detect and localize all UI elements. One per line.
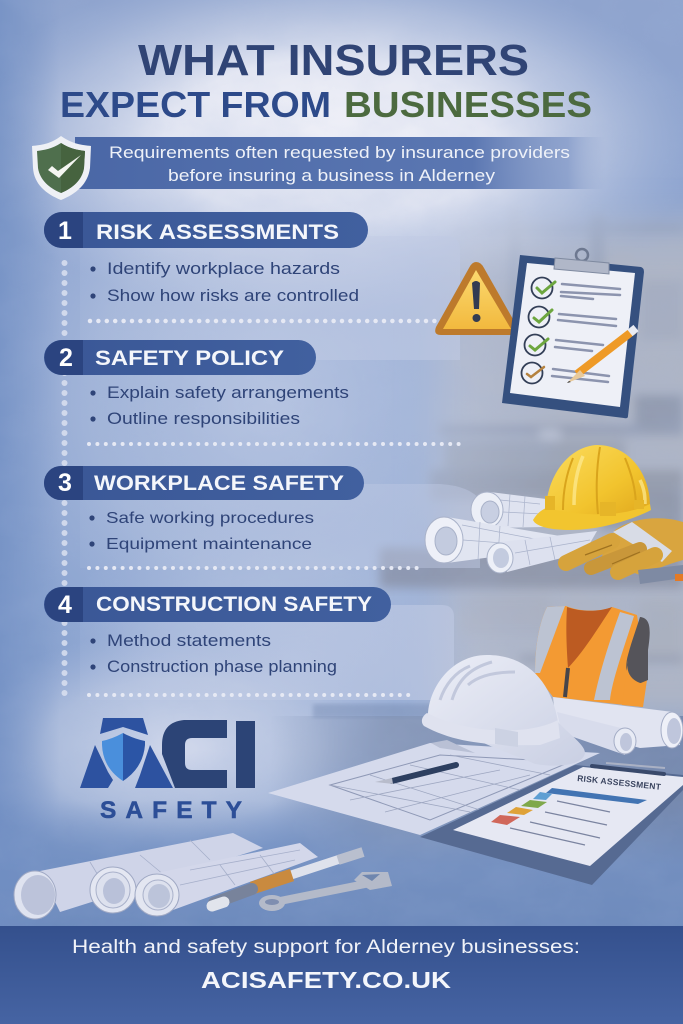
city haze on right xyxy=(440,225,683,725)
big roll xyxy=(553,697,680,748)
small roll xyxy=(557,712,625,755)
bullets 4: Method statements xyxy=(107,632,271,650)
title: EXPECT FROM xyxy=(60,84,331,125)
bullets 2: Explain safety arrangements xyxy=(107,384,349,402)
bullets 2: Outline responsibilities xyxy=(107,410,300,428)
bullets 2 xyxy=(90,384,349,428)
illustration: rolled plans behind white helmet xyxy=(553,697,683,755)
roll C xyxy=(135,843,318,916)
heading pill 2: SAFETY POLICY xyxy=(95,347,284,370)
blueprint roll front right xyxy=(487,531,597,573)
heading pill 4: 4 xyxy=(58,591,72,619)
title xyxy=(60,36,592,125)
table surface xyxy=(270,548,683,931)
letter C xyxy=(162,720,227,788)
illustration: bottom blueprint rolls xyxy=(14,833,392,919)
heading pill 2 xyxy=(44,340,316,375)
subtitle banner: before insuring a business in Alderney xyxy=(168,166,496,185)
panel 3 background xyxy=(80,484,480,568)
blueprint roll back xyxy=(471,492,546,528)
bullets 3: Safe working procedures xyxy=(106,510,314,527)
icon: shield with check xyxy=(32,136,91,200)
bullets 3 xyxy=(89,510,314,553)
letter I xyxy=(236,721,255,788)
heading pill 1: 1 xyxy=(58,217,72,245)
heading pill 4 xyxy=(44,587,391,622)
bullets 4: Construction phase planning xyxy=(107,658,337,676)
clipboard clip xyxy=(592,763,665,774)
footer website: ACISAFETY.CO.UK xyxy=(201,967,451,993)
section 2: safety policy xyxy=(44,340,463,444)
screwdriver tool xyxy=(212,852,363,906)
footer tagline: Health and safety support for Alderney businesses: xyxy=(72,937,580,958)
bullets 4 xyxy=(90,632,337,676)
heading pill 3 xyxy=(44,466,364,500)
heading pill 1 xyxy=(44,212,368,248)
illustration: blueprint sheet xyxy=(268,743,600,835)
title: WHAT INSURERS xyxy=(138,36,529,85)
tool: pliers xyxy=(638,565,683,584)
work gloves xyxy=(566,518,683,575)
blueprint roll front left xyxy=(425,517,560,563)
heading pill 3: WORKPLACE SAFETY xyxy=(94,472,344,495)
bullets 1 xyxy=(90,260,359,305)
pencil xyxy=(567,328,636,383)
pen xyxy=(375,765,456,784)
upper glow xyxy=(0,0,683,320)
icon: warning triangle xyxy=(435,262,518,335)
roll B xyxy=(90,867,136,913)
footer band xyxy=(0,926,683,1024)
panel 4 background xyxy=(80,605,454,700)
yellow hard hat xyxy=(533,445,651,530)
section 4: construction safety xyxy=(44,587,454,700)
icon: clipboard checklist xyxy=(502,249,644,418)
title: BUSINESSES xyxy=(344,84,592,125)
wrench xyxy=(259,872,392,911)
roll A xyxy=(14,833,263,919)
panel 1 background xyxy=(80,236,460,360)
bullets 3: Equipment maintenance xyxy=(106,536,312,553)
section 1: risk assessments xyxy=(44,212,460,360)
subtitle banner xyxy=(75,137,605,189)
wordmark SAFETY: SAFETY xyxy=(100,797,242,824)
heading pill 1: RISK ASSESSMENTS xyxy=(96,221,339,244)
form header bar xyxy=(546,788,647,804)
coloured risk rows xyxy=(491,792,552,825)
heading pill 2: 2 xyxy=(59,344,73,372)
bullets 1: Show how risks are controlled xyxy=(107,287,359,305)
form title: RISK ASSESSMENT xyxy=(577,773,662,792)
heading pill 4: CONSTRUCTION SAFETY xyxy=(96,593,372,616)
illustration: orange safety vest xyxy=(535,606,650,707)
logo: ACI Safety xyxy=(80,718,255,824)
heading pill 3: 3 xyxy=(58,469,72,497)
vertical dotted timeline xyxy=(62,263,68,695)
clipboard clip xyxy=(554,249,609,274)
checklist rows xyxy=(522,278,620,384)
subtitle banner: Requirements often requested by insurance providers xyxy=(109,143,570,162)
section 3: workplace safety xyxy=(44,466,480,568)
illustration: risk assessment clipboard xyxy=(420,763,683,885)
illustration: blueprint rolls and yellow hard hat xyxy=(425,445,683,584)
illustration: white hard hat xyxy=(422,655,585,766)
bullets 1: Identify workplace hazards xyxy=(107,260,340,278)
letter A with shield xyxy=(80,718,173,788)
